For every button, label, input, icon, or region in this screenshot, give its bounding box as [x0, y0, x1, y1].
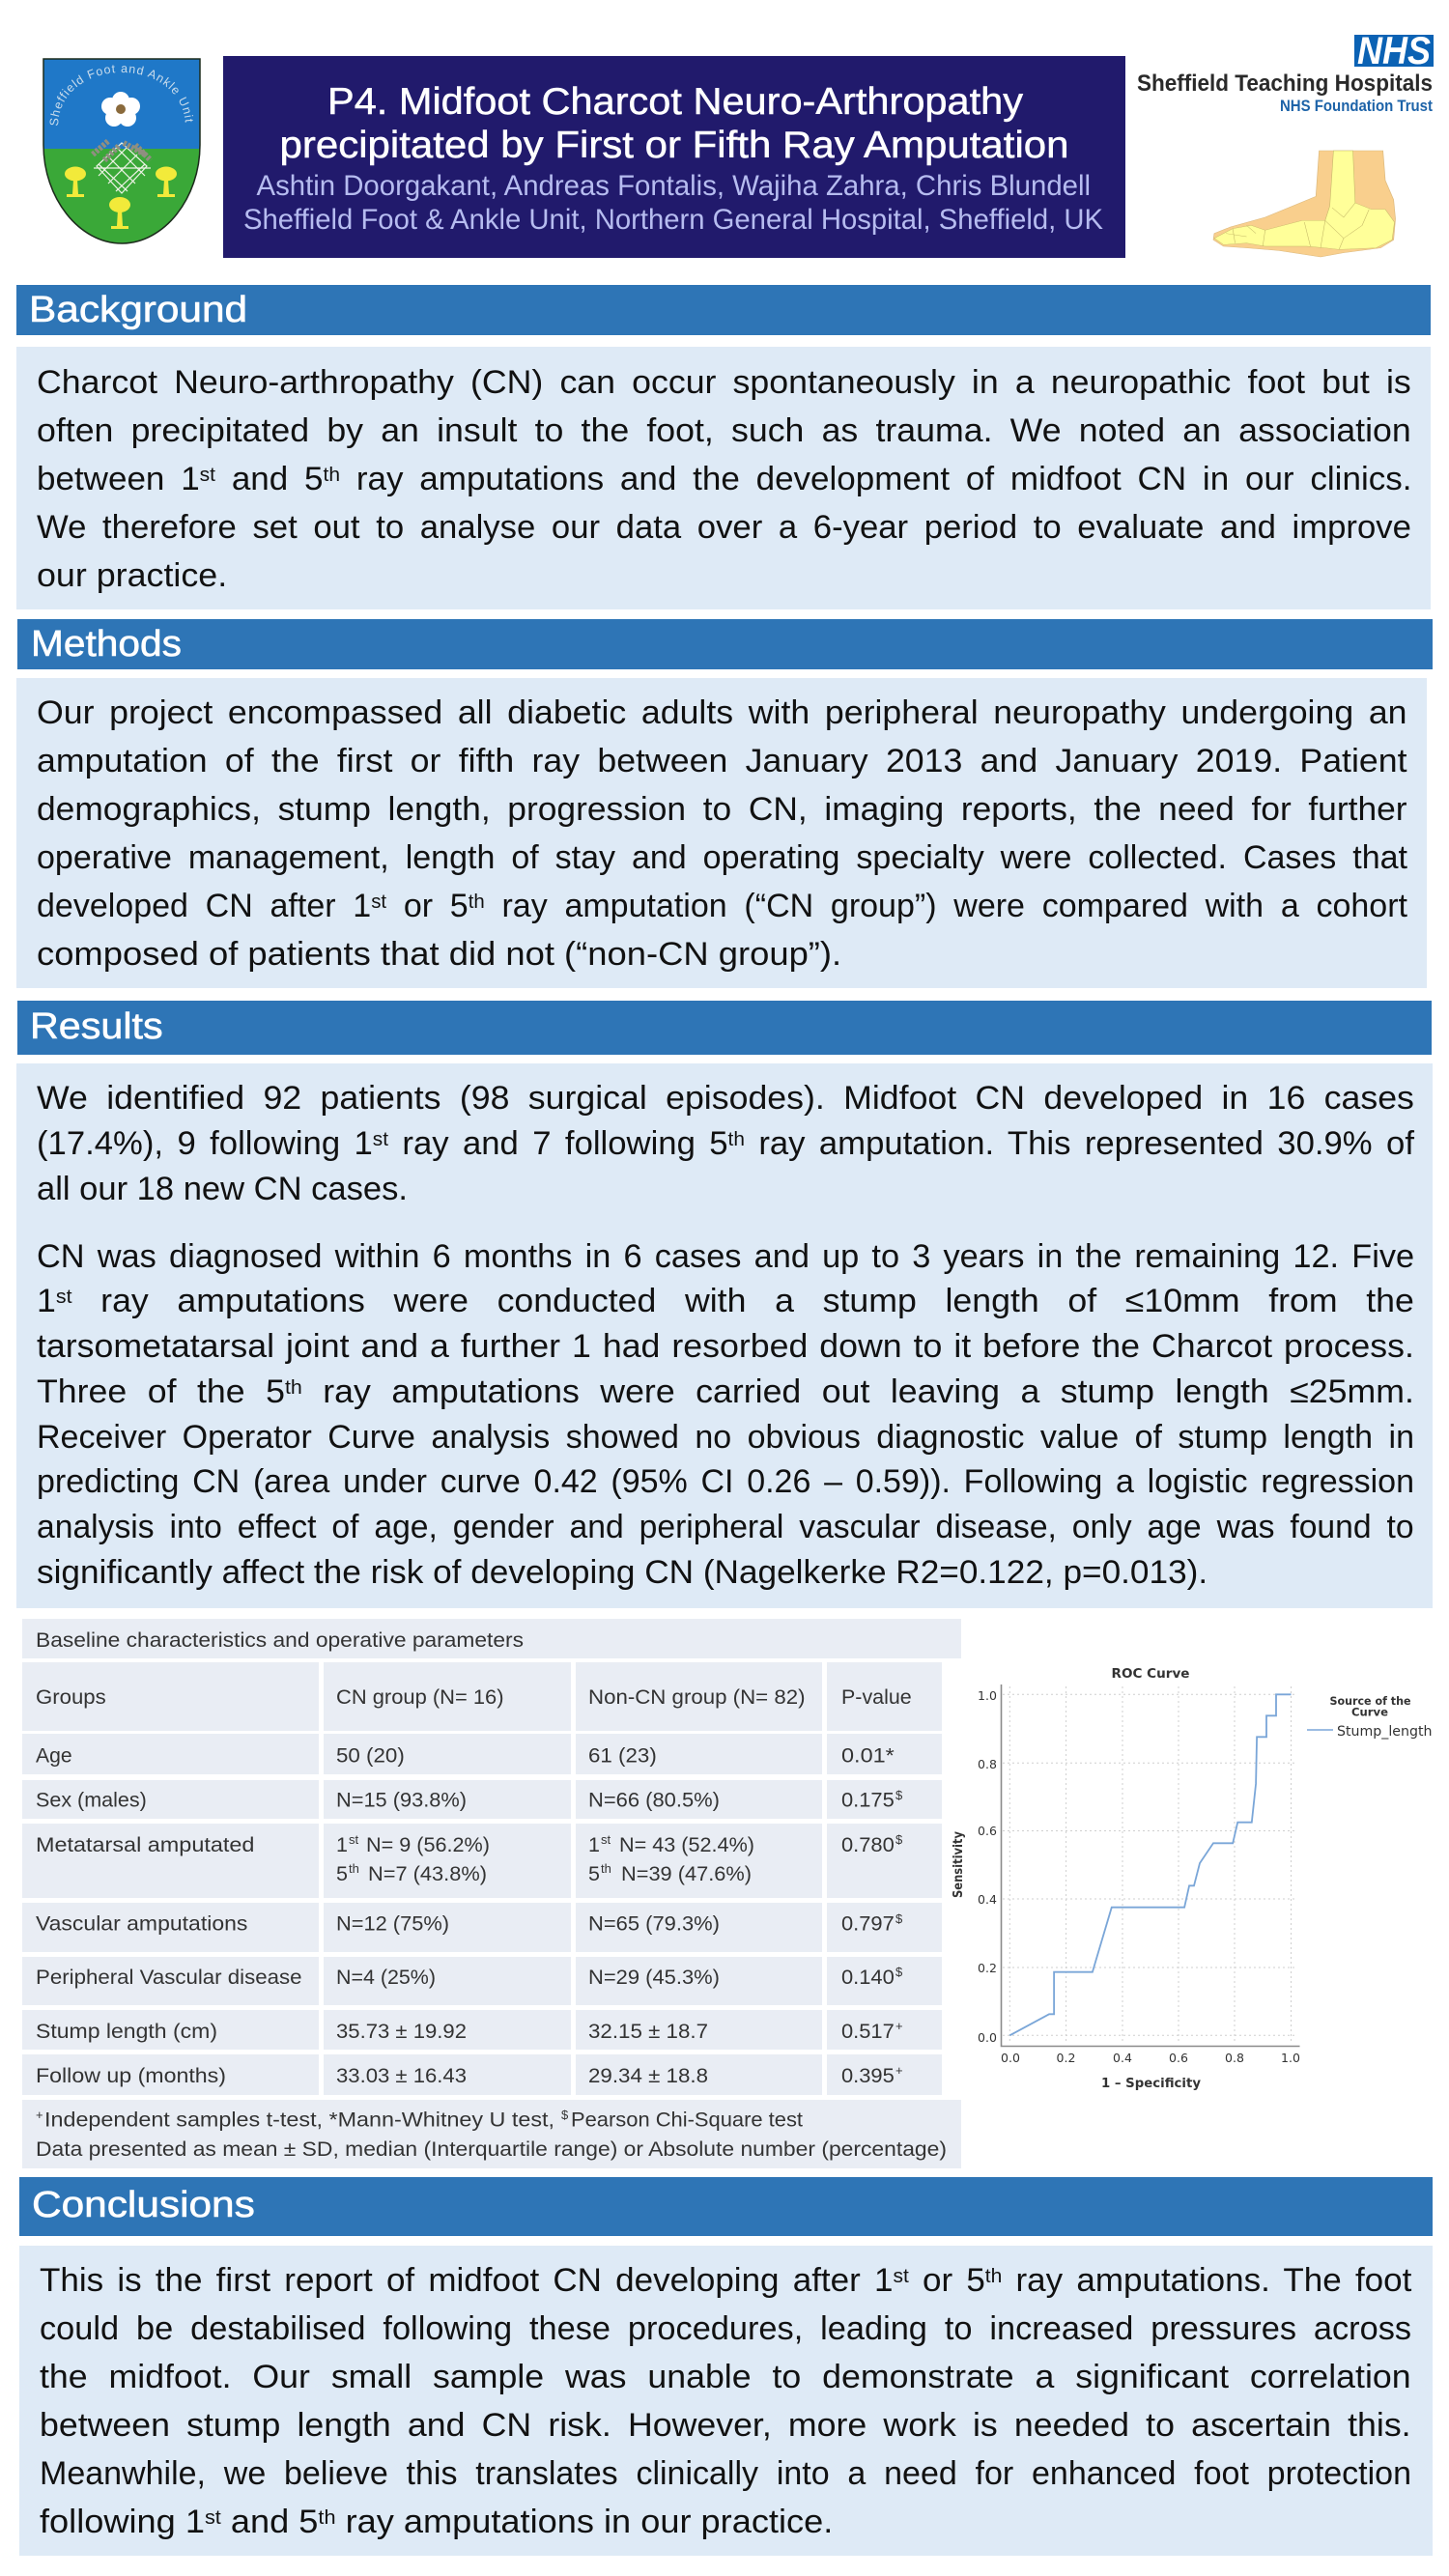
section header: Background: Background [29, 290, 247, 330]
row: age: 50 (20) [336, 1744, 405, 1768]
chart title: ROC Curve [1111, 1667, 1190, 1682]
row: stump length: 35.73 ± 19.92 [336, 2020, 467, 2043]
panel: conclusions text: between stump length and CN risk. However, more work is needed to ascertain this. [40, 2407, 1411, 2444]
row: peripheral vascular disease: Peripheral Vascular disease [36, 1966, 301, 1989]
trees [65, 166, 177, 229]
panel: background text: We therefore set out to analyse our data over a 6-year period to evaluate and improve [37, 509, 1411, 546]
table footnote [22, 2100, 961, 2168]
panel: background text: between 1st and 5th ray amputations and the development of midfoot CN in our clinics. [37, 461, 1411, 497]
crest: Sheffield Foot and Ankle Unit shield: Sheffield Foot and Ankle Unit [50, 65, 193, 126]
row: stump length: + [895, 2019, 903, 2033]
header row: Non-CN group (N= 82) [588, 1685, 806, 1709]
table footnote: Independent samples t-test, *Mann-Whitney U test, [44, 2108, 554, 2131]
legend: Stump_length [1337, 1724, 1432, 1740]
panel: methods text: operative management, length of stay and operating specialty were collected. Cases that [37, 839, 1407, 876]
table: baseline characteristics and operative parameters [22, 1619, 961, 2168]
row: metatarsal amputated: N= 43 (52.4%) [619, 1833, 754, 1856]
title block [223, 56, 1125, 258]
row: metatarsal amputated: 1 [588, 1833, 600, 1856]
header row: P-value [841, 1685, 912, 1709]
title: P4. Midfoot Charcot Neuro-Arthropathy [327, 81, 1024, 123]
panel: conclusions text [19, 2246, 1433, 2556]
panel: results text: CN was diagnosed within 6 months in 6 cases and up to 3 years in the remaining 12. Five [37, 1238, 1414, 1275]
section header: Methods [17, 619, 1433, 669]
x axis tick labels: 0.8 [1225, 2051, 1244, 2065]
icon: foot skeleton [1213, 151, 1396, 257]
panel: methods text: Our project encompassed all diabetic adults with peripheral neuropathy undergoing an [37, 694, 1407, 731]
row: metatarsal amputated: Metatarsal amputated [36, 1833, 254, 1856]
row: stump length: 0.517 [841, 2020, 895, 2043]
row: peripheral vascular disease: $ [895, 1965, 903, 1979]
row: sex: $ [895, 1788, 903, 1802]
y axis tick labels [978, 1688, 997, 2045]
row: vascular amputations [22, 1903, 942, 1952]
row: age: Age [36, 1744, 72, 1768]
panel: conclusions text: Meanwhile, we believe this translates clinically into a need for enhanced foot protection [40, 2455, 1411, 2492]
x axis tick labels [1001, 2051, 1300, 2065]
row: follow up: + [895, 2063, 903, 2078]
table title: Baseline characteristics and operative parameters [36, 1628, 524, 1652]
panel: results text: all our 18 new CN cases. [37, 1171, 408, 1207]
title [280, 81, 1068, 166]
row: metatarsal amputated: 5 [336, 1862, 348, 1885]
row: follow up: Follow up (months) [36, 2064, 226, 2087]
row: follow up: 0.395 [841, 2064, 895, 2087]
y axis tick labels: 0.8 [978, 1757, 997, 1771]
row: peripheral vascular disease [22, 1957, 942, 2005]
legend [1307, 1694, 1432, 1740]
authors and affiliation [243, 170, 1103, 236]
row: metatarsal amputated: $ [895, 1832, 903, 1847]
panel: background text: often precipitated by an insult to the foot, such as trauma. We noted an association [37, 412, 1411, 449]
y axis tick labels: 0.4 [978, 1892, 997, 1907]
row: follow up: 33.03 ± 16.43 [336, 2064, 467, 2087]
legend: Source of the [1329, 1694, 1411, 1708]
table footnote: $ [561, 2108, 569, 2122]
section header: Results [17, 1001, 1432, 1055]
legend: Curve [1351, 1706, 1388, 1719]
axes [1001, 1684, 1300, 2046]
x axis tick labels: 1.0 [1281, 2051, 1300, 2065]
panel: results text: analysis into effect of age, gender and peripheral vascular disease, only age was found to [37, 1509, 1414, 1545]
row: peripheral vascular disease: 0.140 [841, 1966, 895, 1989]
row: age [22, 1734, 942, 1774]
row: metatarsal amputated: 5 [588, 1862, 600, 1885]
logo: NHS Sheffield Teaching Hospitals [1137, 30, 1434, 115]
row: metatarsal amputated: 0.780 [841, 1833, 895, 1856]
panel: results text: Three of the 5th ray amputations were carried out leaving a stump length ≤25mm. [37, 1373, 1414, 1410]
x axis label: 1 – Specificity [1101, 2076, 1201, 2091]
panel: results text: tarsometatarsal joint and a further 1 had resorbed down to it before the Charcot process. [37, 1328, 1414, 1365]
header row: Groups [36, 1685, 106, 1709]
section header: Methods: Methods [31, 624, 182, 665]
panel: methods text: demographics, stump length, progression to CN, imaging reports, the need for further [37, 791, 1407, 828]
chart: ROC curve [952, 1667, 1432, 2091]
row: vascular amputations: N=65 (79.3%) [588, 1912, 720, 1936]
row: metatarsal amputated: st [349, 1832, 359, 1847]
x axis tick labels: 0.0 [1001, 2051, 1020, 2065]
panel: methods text: composed of patients that did not (“non-CN group”). [37, 936, 841, 973]
table footnote: Pearson Chi-Square test [571, 2108, 803, 2131]
row: metatarsal amputated: N= 9 (56.2%) [366, 1833, 490, 1856]
x axis tick labels: 0.6 [1169, 2051, 1188, 2065]
panel: results text: 1st ray amputations were conducted with a stump length of ≤10mm from the [37, 1283, 1414, 1319]
y axis tick labels: 0.0 [978, 2030, 997, 2045]
panel: conclusions text: the midfoot. Our small sample was unable to demonstrate a significant correlation [40, 2359, 1411, 2395]
header row: CN group (N= 16) [336, 1685, 504, 1709]
panel: results text: (17.4%), 9 following 1st ray and 7 following 5th ray amputation. This represented 30.9% of [37, 1125, 1414, 1162]
panel: background text [16, 347, 1431, 609]
row: age: 61 (23) [588, 1744, 657, 1768]
row: stump length: 32.15 ± 18.7 [588, 2020, 708, 2043]
row: follow up: 29.34 ± 18.8 [588, 2064, 708, 2087]
x axis tick labels: 0.4 [1113, 2051, 1132, 2065]
row: stump length: Stump length (cm) [36, 2020, 217, 2043]
curve: stump length [1009, 1694, 1291, 2035]
row: sex [22, 1780, 942, 1819]
row: peripheral vascular disease: N=4 (25%) [336, 1966, 436, 1989]
panel: conclusions text: could be destabilised following these procedures, leading to increased pressures across [40, 2310, 1411, 2347]
section header: Conclusions [19, 2177, 1433, 2236]
y axis tick labels: 0.2 [978, 1961, 997, 1975]
panel: background text: our practice. [37, 557, 227, 594]
row: vascular amputations: Vascular amputations [36, 1912, 247, 1936]
panel: conclusions text: following 1st and 5th ray amputations in our practice. [40, 2504, 833, 2540]
row: follow up [22, 2054, 942, 2095]
row: metatarsal amputated: th [601, 1861, 611, 1876]
section header: Results: Results [30, 1006, 163, 1047]
crossed net [93, 141, 151, 193]
panel: methods text [16, 678, 1427, 988]
row: sex: N=15 (93.8%) [336, 1789, 467, 1812]
row: sex: 0.175 [841, 1789, 895, 1812]
section header: Background [16, 285, 1431, 335]
table footnote: Data presented as mean ± SD, median (Interquartile range) or Absolute number (percentage) [36, 2137, 947, 2161]
table footnote: + [36, 2108, 43, 2122]
section header: Conclusions: Conclusions [32, 2185, 255, 2225]
row: metatarsal amputated: st [601, 1832, 611, 1847]
row: metatarsal amputated: N=39 (47.6%) [621, 1862, 752, 1885]
panel: results text: predicting CN (area under curve 0.42 (95% CI 0.26 – 0.59)). Following a logistic regression [37, 1463, 1414, 1500]
row: vascular amputations: $ [895, 1911, 903, 1926]
panel: results text [16, 1063, 1433, 1608]
authors and affiliation: Sheffield Foot & Ankle Unit, Northern General Hospital, Sheffield, UK [243, 204, 1103, 236]
row: metatarsal amputated: 1 [336, 1833, 348, 1856]
table title [22, 1619, 961, 1658]
row: metatarsal amputated: N=7 (43.8%) [368, 1862, 487, 1885]
row: stump length [22, 2010, 942, 2050]
y axis tick labels: 0.6 [978, 1824, 997, 1838]
rose [101, 92, 140, 127]
panel: conclusions text: This is the first report of midfoot CN developing after 1st or 5th ray amputations. The foot [40, 2262, 1411, 2299]
title: precipitated by First or Fifth Ray Amputation [280, 125, 1068, 166]
row: vascular amputations: 0.797 [841, 1912, 895, 1936]
row: peripheral vascular disease: N=29 (45.3%) [588, 1966, 720, 1989]
panel: results text: significantly affect the risk of developing CN (Nagelkerke R2=0.122, p=0.013). [37, 1554, 1208, 1591]
y axis tick labels: 1.0 [978, 1688, 997, 1703]
crest: Sheffield Foot and Ankle Unit shield [43, 58, 201, 244]
panel: methods text: amputation of the first or fifth ray between January 2013 and January 2019. Patient [37, 743, 1407, 779]
authors and affiliation: Ashtin Doorgakant, Andreas Fontalis, Wajiha Zahra, Chris Blundell [257, 170, 1091, 202]
row: sex: Sex (males) [36, 1789, 147, 1812]
panel: results text: We identified 92 patients (98 surgical episodes). Midfoot CN developed in 16 cases [37, 1080, 1414, 1117]
row: metatarsal amputated: th [349, 1861, 359, 1876]
row: metatarsal amputated [22, 1824, 942, 1898]
panel: background text: Charcot Neuro-arthropathy (CN) can occur spontaneously in a neuropathic foot but is [37, 364, 1411, 401]
panel: methods text: developed CN after 1st or 5th ray amputation (“CN group”) were compared with a cohort [37, 888, 1407, 924]
row: age: 0.01* [841, 1744, 895, 1768]
x axis tick labels: 0.2 [1057, 2051, 1075, 2065]
logo: NHS Sheffield Teaching Hospitals: NHS [1357, 30, 1431, 72]
panel: results text: Receiver Operator Curve analysis showed no obvious diagnostic value of stump length in [37, 1419, 1414, 1456]
row: sex: N=66 (80.5%) [588, 1789, 720, 1812]
row: vascular amputations: N=12 (75%) [336, 1912, 449, 1936]
header row [22, 1662, 942, 1731]
